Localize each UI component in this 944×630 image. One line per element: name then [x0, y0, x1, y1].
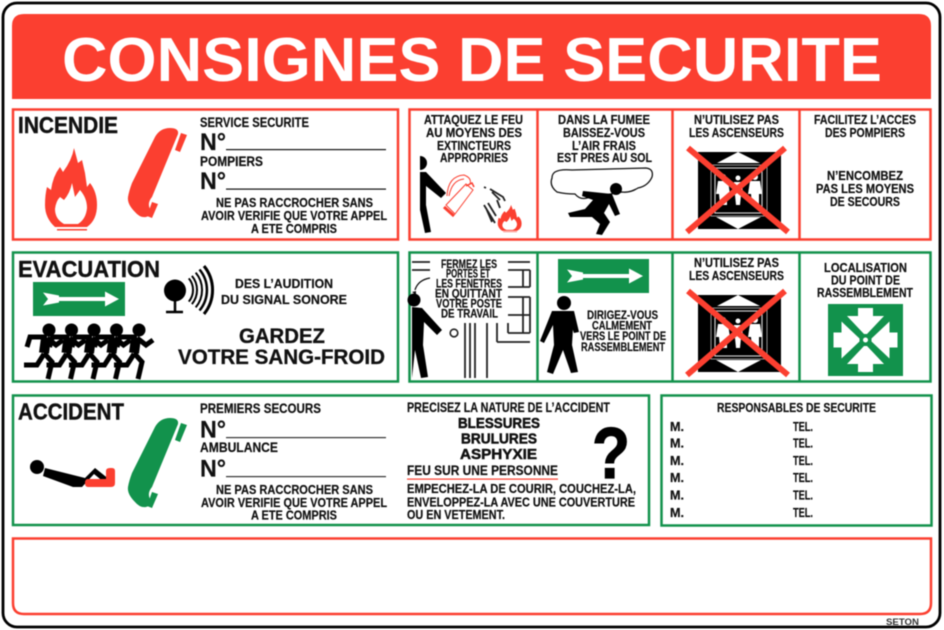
icon: crossed lift	[687, 291, 788, 375]
icon: person with extinguisher	[420, 156, 522, 233]
cell: walk to assembly point: DIRIGEZ-VOUS	[587, 308, 658, 322]
cell: fire access: DE SECOURS	[830, 195, 900, 209]
cell: no lifts	[687, 256, 788, 375]
contact rows: TEL.	[793, 471, 813, 485]
contact rows: TEL.	[793, 506, 813, 520]
cell: no lifts: LES ASCENSEURS	[689, 126, 784, 140]
manufacturer mark: SETON	[886, 617, 919, 627]
icon: running people	[24, 324, 153, 379]
cell: assembly point: LOCALISATION	[824, 261, 907, 275]
cell: close doors: LES FENETRES	[436, 276, 502, 290]
title: CONSIGNES DE SECURITE	[62, 26, 882, 95]
icon: injured person	[30, 460, 115, 487]
accident nature text: BLESSURES	[458, 416, 540, 432]
accident nature text: ENVELOPPEZ-LA AVEC UNE COUVERTURE	[407, 496, 635, 510]
first aid numbers: N°	[200, 456, 226, 482]
contact rows: M.	[670, 488, 684, 502]
accident nature text: EMPECHEZ-LA DE COURIR, COUCHEZ-LA,	[407, 482, 636, 496]
emergency numbers: N°	[200, 129, 226, 156]
cell: smoke: EST PRES AU SOL	[557, 151, 652, 165]
emergency numbers	[200, 115, 386, 195]
contact rows: M.	[670, 436, 684, 450]
icon: flame	[45, 148, 97, 230]
contact rows: M.	[670, 454, 684, 468]
heading: incendie: INCENDIE	[18, 112, 118, 138]
emergency numbers: N°	[200, 168, 226, 195]
stay calm message	[178, 324, 385, 369]
icon: red telephone	[128, 128, 187, 218]
first aid numbers	[200, 401, 386, 482]
panel: blank notes area	[13, 538, 931, 614]
accident nature text: ASPHYXIE	[460, 447, 537, 463]
contact rows: TEL.	[793, 436, 813, 450]
cell: no lifts	[687, 113, 788, 232]
cell: no lifts: LES ASCENSEURS	[689, 269, 784, 283]
cell: fire access	[814, 113, 916, 209]
warning text	[201, 483, 387, 522]
title banner	[12, 14, 931, 99]
cell: smoke: L’AIR FRAIS	[572, 139, 636, 153]
stay calm message: VOTRE SANG-FROID	[178, 345, 385, 369]
contact rows: TEL.	[793, 454, 813, 468]
cell: no lifts: N’UTILISEZ PAS	[694, 113, 779, 127]
cell: smoke	[551, 113, 652, 235]
cell: smoke: DANS LA FUMEE	[558, 113, 650, 127]
contact rows: TEL.	[793, 488, 813, 502]
cell: fire access: N’ENCOMBEZ	[827, 169, 903, 183]
contact rows	[670, 420, 813, 520]
cell: fire access: DES POMPIERS	[825, 126, 905, 140]
cell: smoke: BAISSEZ-VOUS	[563, 126, 645, 140]
panel: accident	[13, 396, 649, 525]
cell: walk to assembly point: VERS LE POINT DE	[580, 329, 666, 343]
panel: evacuation instructions	[408, 252, 930, 382]
cell: assembly point: DU POINT DE	[831, 274, 900, 288]
warning text: NE PAS RACCROCHER SANS	[216, 196, 373, 210]
panel: safety officers	[662, 396, 932, 526]
heading: accident: ACCIDENT	[18, 398, 124, 424]
warning text: A ETE COMPRIS	[251, 222, 337, 236]
warning text: AVOIR VERIFIE QUE VOTRE APPEL	[201, 209, 387, 223]
cell: attack fire	[420, 113, 523, 233]
first aid numbers: PREMIERS SECOURS	[200, 401, 321, 416]
cell: close doors: DE TRAVAIL	[441, 306, 498, 320]
warning text	[201, 196, 387, 236]
accident nature text: OU EN VETEMENT.	[407, 508, 505, 522]
contact rows: M.	[670, 506, 684, 520]
icon: green telephone	[128, 418, 187, 508]
cell: fire access: PAS LES MOYENS	[816, 182, 914, 196]
cell: attack fire: ATTAQUEZ LE FEU	[424, 113, 523, 127]
warning text: AVOIR VERIFIE QUE VOTRE APPEL	[201, 496, 387, 510]
icon: green arrow sign	[558, 259, 649, 293]
first aid numbers: AMBULANCE	[200, 440, 278, 455]
contact rows: M.	[670, 471, 684, 485]
contact rows: M.	[670, 420, 684, 434]
cell: attack fire: EXTINCTEURS	[437, 139, 511, 153]
accident nature text	[407, 400, 636, 522]
icon: room lines and person	[408, 262, 530, 378]
cell: walk to assembly point: CALMEMENT	[592, 318, 653, 332]
icon: walking person	[540, 296, 579, 374]
icon: question mark: ?	[592, 414, 630, 494]
cell: close doors: VOTRE POSTE	[436, 296, 502, 310]
emergency numbers: POMPIERS	[200, 154, 263, 169]
accident nature text: FEU SUR UNE PERSONNE	[407, 463, 558, 478]
cell: no lifts: N’UTILISEZ PAS	[694, 256, 779, 270]
cell: close doors: EN QUITTANT	[435, 286, 503, 300]
cell: fire access: FACILITEZ L’ACCES	[814, 113, 916, 127]
icon: green exit arrow	[33, 282, 125, 316]
signal text	[221, 277, 347, 307]
icon: siren	[164, 266, 213, 314]
icon: cloud and runner	[551, 168, 652, 235]
cell: attack fire: APPROPRIES	[440, 151, 508, 165]
icon: assembly point	[828, 304, 903, 376]
accident nature text: PRECISEZ LA NATURE DE L’ACCIDENT	[407, 400, 611, 415]
cell: walk to assembly point	[540, 259, 666, 374]
heading: evacuation: EVACUATION	[18, 256, 160, 282]
cell: walk to assembly point: RASSEMBLEMENT	[581, 340, 666, 354]
emergency numbers: SERVICE SECURITE	[200, 115, 309, 130]
stay calm message: GARDEZ	[239, 324, 325, 348]
cell: close doors: PORTES ET	[446, 266, 490, 280]
accident nature text: BRULURES	[461, 432, 537, 448]
first aid numbers: N°	[200, 416, 226, 444]
panel: fire instructions	[410, 109, 930, 240]
cell: close doors: FERMEZ LES	[441, 257, 497, 271]
heading: responsables: RESPONSABLES DE SECURITE	[717, 401, 876, 415]
warning text: A ETE COMPRIS	[251, 508, 337, 522]
warning text: NE PAS RACCROCHER SANS	[216, 483, 373, 497]
cell: close doors	[408, 257, 530, 378]
panel: incendie	[13, 110, 398, 240]
cell: assembly point: RASSEMBLEMENT	[817, 286, 913, 300]
contact rows: TEL.	[793, 420, 813, 434]
panel: evacuation	[13, 252, 398, 382]
cell: assembly point	[817, 261, 913, 376]
signal text: DU SIGNAL SONORE	[221, 293, 347, 307]
icon: crossed lift	[687, 148, 788, 232]
cell: attack fire: AU MOYENS DES	[426, 126, 522, 140]
signal text: DES L’AUDITION	[235, 277, 333, 291]
